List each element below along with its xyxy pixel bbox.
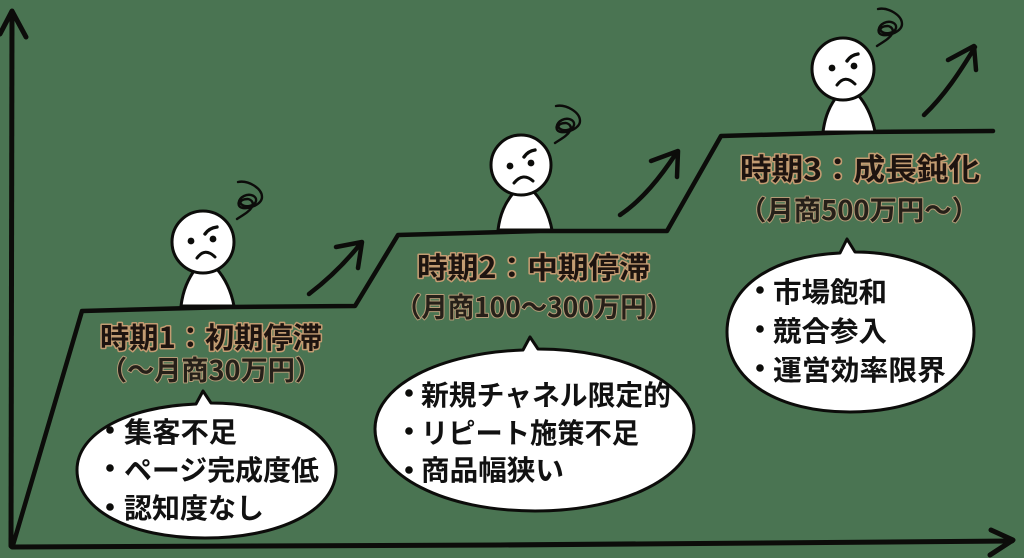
character 3	[812, 9, 902, 132]
speech bubble: stage 2: 新規チャネル限定的	[421, 374, 671, 414]
heading: stage 2: 時期2：中期停滞	[417, 245, 650, 287]
horizontal axis arrow	[12, 530, 1013, 555]
speech bubble: stage 1: ページ完成度低	[124, 449, 319, 489]
speech bubble: stage 2: 商品幅狭い	[421, 449, 564, 489]
speech bubble: stage 2: リピート施策不足	[421, 412, 639, 452]
speech bubble: stage 3: 市場飽和	[773, 271, 887, 311]
character 2	[491, 106, 580, 230]
heading: stage 3: （月商500万円～）	[739, 189, 979, 228]
heading: stage 1	[100, 315, 322, 388]
speech bubble: stage 1	[77, 391, 336, 538]
arrow 2	[620, 151, 678, 215]
vertical axis arrow	[0, 11, 26, 546]
heading: stage 2	[395, 245, 673, 325]
heading: stage 3	[739, 145, 980, 228]
speech bubble: stage 3	[727, 239, 974, 412]
speech bubble: stage 1: 集客不足	[124, 411, 237, 451]
speech bubble: stage 3: 運営効率限界	[773, 349, 946, 389]
speech bubble: stage 2	[375, 337, 694, 511]
speech bubble: stage 3: 競合参入	[773, 310, 887, 350]
heading: stage 3: 時期3：成長鈍化	[740, 145, 980, 189]
arrow 3	[924, 46, 976, 115]
speech bubble: stage 1: 認知度なし	[124, 487, 264, 527]
heading: stage 1: （～月商30万円）	[100, 349, 322, 388]
heading: stage 2: （月商100～300万円）	[395, 286, 673, 325]
stair growth line	[13, 131, 993, 545]
arrow 1	[309, 242, 362, 294]
character 1	[172, 182, 262, 306]
heading: stage 1: 時期1：初期停滞	[100, 315, 322, 357]
